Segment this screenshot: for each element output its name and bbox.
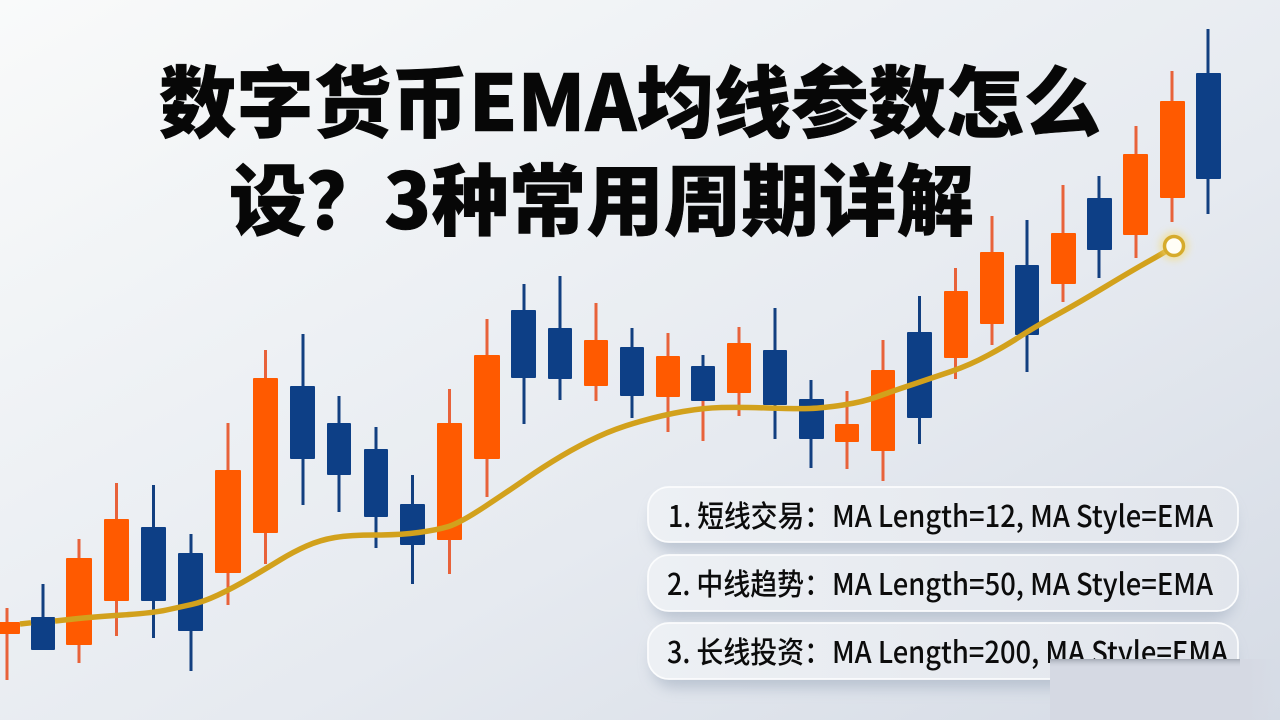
title line 1: 数字货币EMA均线参数怎么 <box>159 42 1101 154</box>
candle 28 <box>980 216 1004 345</box>
candle 10 <box>327 396 351 512</box>
candle 12 <box>400 475 425 584</box>
candle 3 <box>66 539 92 663</box>
title line 2: 设？3种常用周期详解 <box>229 140 974 252</box>
candle 1 <box>0 608 20 680</box>
candle 16 <box>548 276 572 400</box>
pill 3: long term: MA Length=200, MA Style=EMA <box>832 628 1228 672</box>
candle 2 <box>31 584 55 650</box>
candle 32 <box>1123 126 1148 258</box>
candle 31 <box>1087 176 1112 278</box>
pill 3: long term: 3. 长线投资： <box>667 628 831 672</box>
candle 14 <box>474 319 500 497</box>
candle 9 <box>290 334 315 505</box>
candle 8 <box>253 350 278 564</box>
candle 30 <box>1051 185 1076 302</box>
panel: parameter list <box>648 487 1238 688</box>
pill 1: short term <box>648 487 1238 552</box>
candle 26 <box>907 296 932 444</box>
candle 6 <box>178 534 203 671</box>
pill 2: mid term: 2. 中线趋势： <box>667 560 831 604</box>
pill 1: short term: MA Length=12, MA Style=EMA <box>832 492 1213 536</box>
candle 4 <box>104 483 129 636</box>
candle 24 <box>835 391 859 469</box>
title <box>159 42 1101 252</box>
candle 23 <box>799 380 824 468</box>
candle 20 <box>691 355 715 441</box>
candle 19 <box>656 333 680 432</box>
candle 22 <box>763 308 787 439</box>
candle 34 <box>1196 29 1221 214</box>
pill 3: long term <box>648 623 1238 688</box>
candle 17 <box>584 303 608 401</box>
EMA end marker <box>1160 232 1188 260</box>
pill 2: mid term <box>648 555 1238 620</box>
candle 25 <box>871 340 895 481</box>
candle 21 <box>727 327 751 416</box>
candle 13 <box>437 389 462 574</box>
candle 7 <box>215 423 241 605</box>
pill 2: mid term: MA Length=50, MA Style=EMA <box>832 560 1213 604</box>
EMA line <box>20 246 1174 624</box>
candle 27 <box>944 268 968 379</box>
watermark cover patch <box>1050 659 1276 720</box>
candle 18 <box>620 328 644 418</box>
candle 15 <box>511 284 536 424</box>
pill 1: short term: 1. 短线交易： <box>668 492 831 536</box>
candle 11 <box>364 427 388 548</box>
candle 5 <box>141 485 166 638</box>
candle 29 <box>1015 220 1039 372</box>
candle 33 <box>1160 71 1185 222</box>
